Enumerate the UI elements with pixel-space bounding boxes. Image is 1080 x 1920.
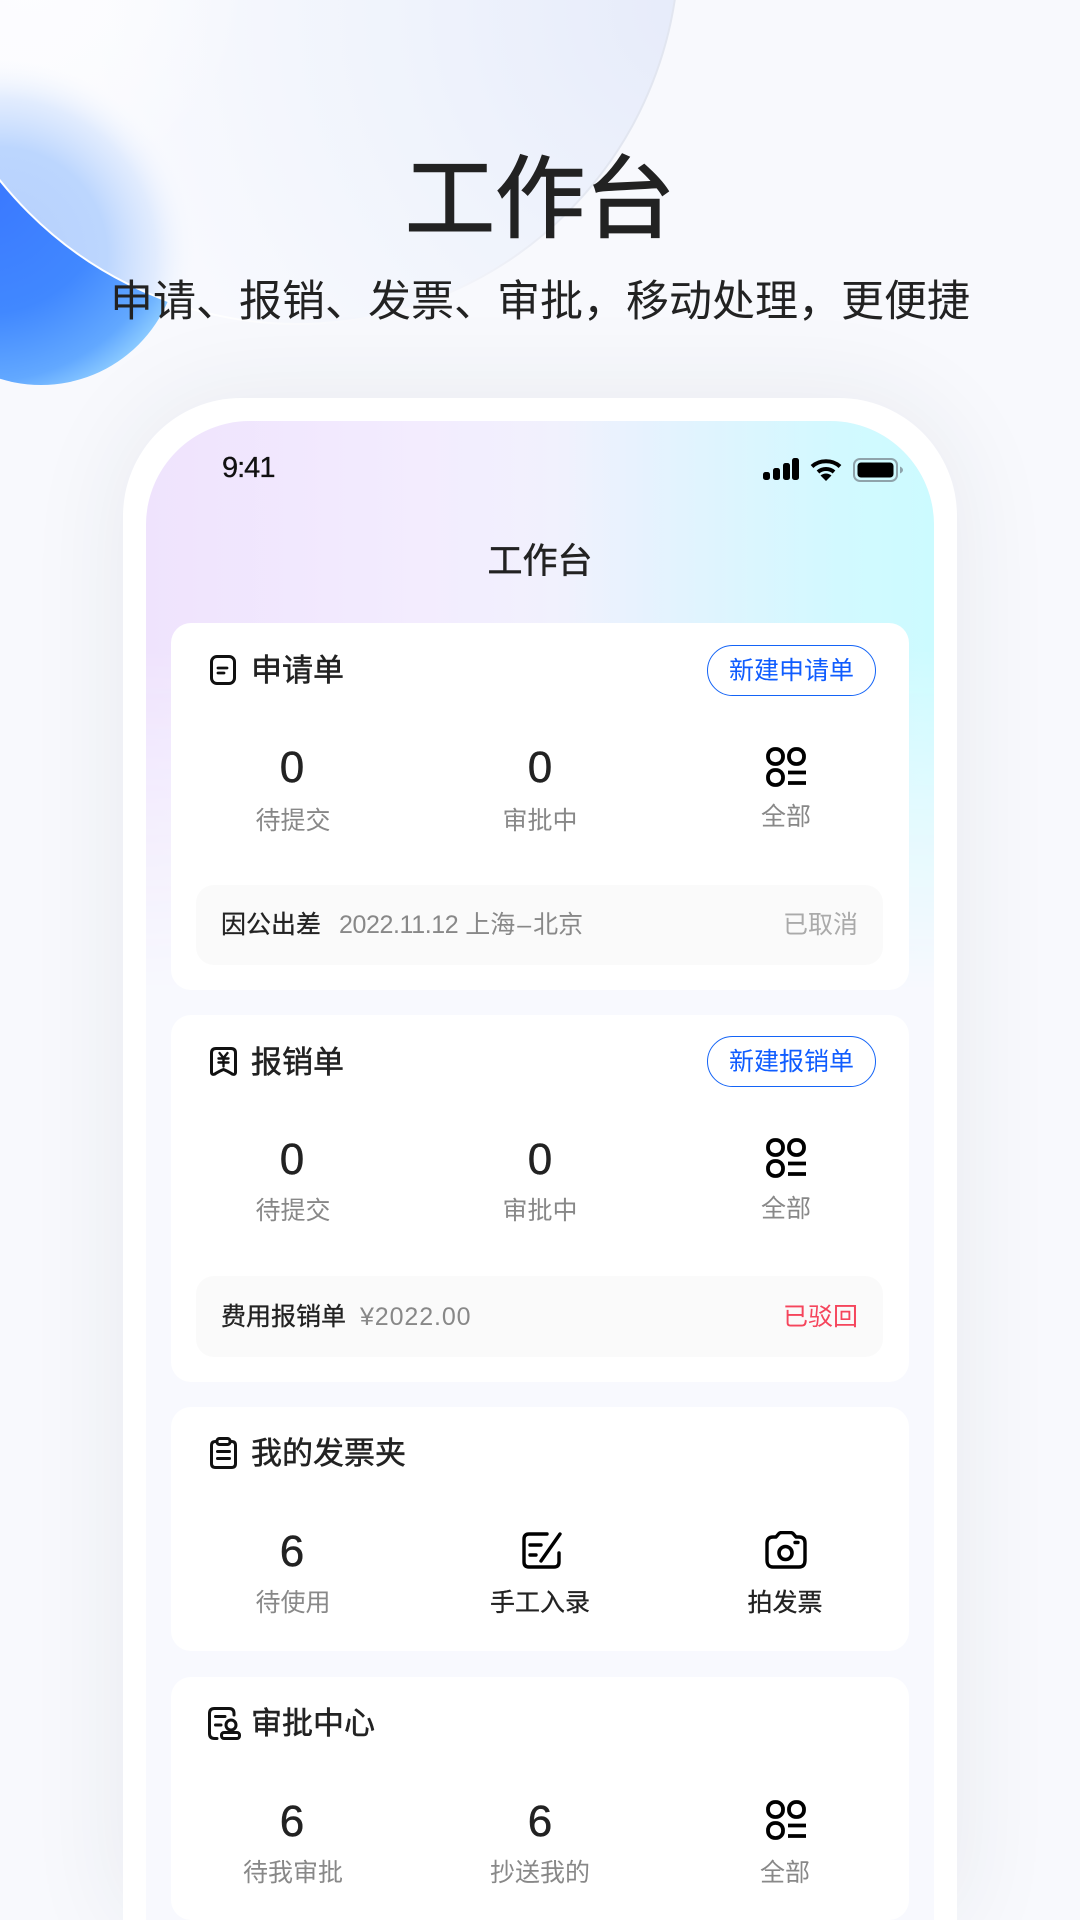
stat: pending submission: 0	[280, 743, 304, 792]
icon: camera	[765, 1531, 807, 1569]
action label: take invoice photo: 拍发票	[747, 1589, 822, 1617]
title: 工作台	[405, 150, 675, 250]
icon: wifi	[810, 459, 842, 481]
icon: signal	[763, 458, 799, 480]
row detail: date and route: 2022.11.12 上海–北京	[339, 911, 583, 939]
row title: expense claim: 费用报销单	[221, 1303, 346, 1331]
blue sphere	[0, 109, 179, 385]
stat label: ready to use: 待使用	[255, 1589, 330, 1617]
stat: copied to me: 6	[528, 1797, 552, 1846]
background decorative circles	[0, 0, 676, 385]
heading: approval center: 审批中心	[251, 1706, 375, 1741]
icon: all grid	[766, 1800, 806, 1840]
row: latest expense report	[196, 1276, 883, 1357]
heading: invoice folder: 我的发票夹	[251, 1436, 406, 1471]
stat label: in approval: 审批中	[502, 807, 578, 835]
row detail: amount: ¥2022.00	[360, 1303, 471, 1331]
stat label: in approval: 审批中	[502, 1197, 578, 1225]
action label: manual entry: 手工入录	[490, 1589, 590, 1617]
stat: awaiting my approval: 6	[280, 1797, 304, 1846]
icon: yuan receipt	[210, 1047, 237, 1076]
button: new expense report: 新建报销单	[729, 1048, 854, 1076]
status bar time: 9:41	[222, 452, 274, 484]
icon: all grid	[766, 1138, 806, 1178]
panel: expense reports	[171, 1015, 909, 1382]
stat: in approval: 0	[528, 743, 552, 792]
stat label: all: 全部	[760, 1859, 810, 1887]
row title: business trip: 因公出差	[221, 911, 321, 939]
stat: in approval: 0	[528, 1135, 552, 1184]
icon: manual entry	[522, 1532, 562, 1569]
stat label: pending submission: 待提交	[255, 807, 330, 835]
button: new application	[707, 645, 876, 696]
icon: approval stamp	[208, 1707, 241, 1740]
stat label: pending submission: 待提交	[255, 1197, 330, 1225]
stat label: copied to me: 抄送我的	[490, 1859, 590, 1887]
button: new application: 新建申请单	[729, 657, 854, 685]
stat label: all: 全部	[761, 803, 811, 831]
phone screen	[146, 421, 934, 980]
panel: invoice folder	[171, 1407, 909, 1651]
stat: ready to use: 6	[280, 1527, 304, 1576]
icon: clipboard	[210, 1437, 237, 1469]
row status: rejected: 已驳回	[783, 1303, 858, 1331]
stat: pending submission: 0	[280, 1135, 304, 1184]
panel: approval center	[171, 1677, 909, 1920]
row status: cancelled: 已取消	[783, 911, 858, 939]
subtitle: 申请、报销、发票、审批，移动处理，更便捷	[110, 278, 970, 326]
icon: form document	[210, 655, 236, 685]
button: new expense report	[707, 1036, 876, 1087]
heading: application forms: 申请单	[251, 653, 344, 688]
icon: battery	[853, 458, 903, 482]
icon: all grid	[766, 747, 806, 787]
frosted glass circle	[0, 0, 676, 302]
stat label: awaiting my approval: 待我审批	[243, 1859, 343, 1887]
phone frame	[123, 398, 957, 1920]
stat label: all: 全部	[761, 1195, 811, 1223]
panel: application forms	[171, 623, 909, 990]
heading: expense reports: 报销单	[251, 1045, 344, 1080]
screen title: 工作台	[487, 542, 592, 581]
row: latest application	[196, 885, 883, 965]
